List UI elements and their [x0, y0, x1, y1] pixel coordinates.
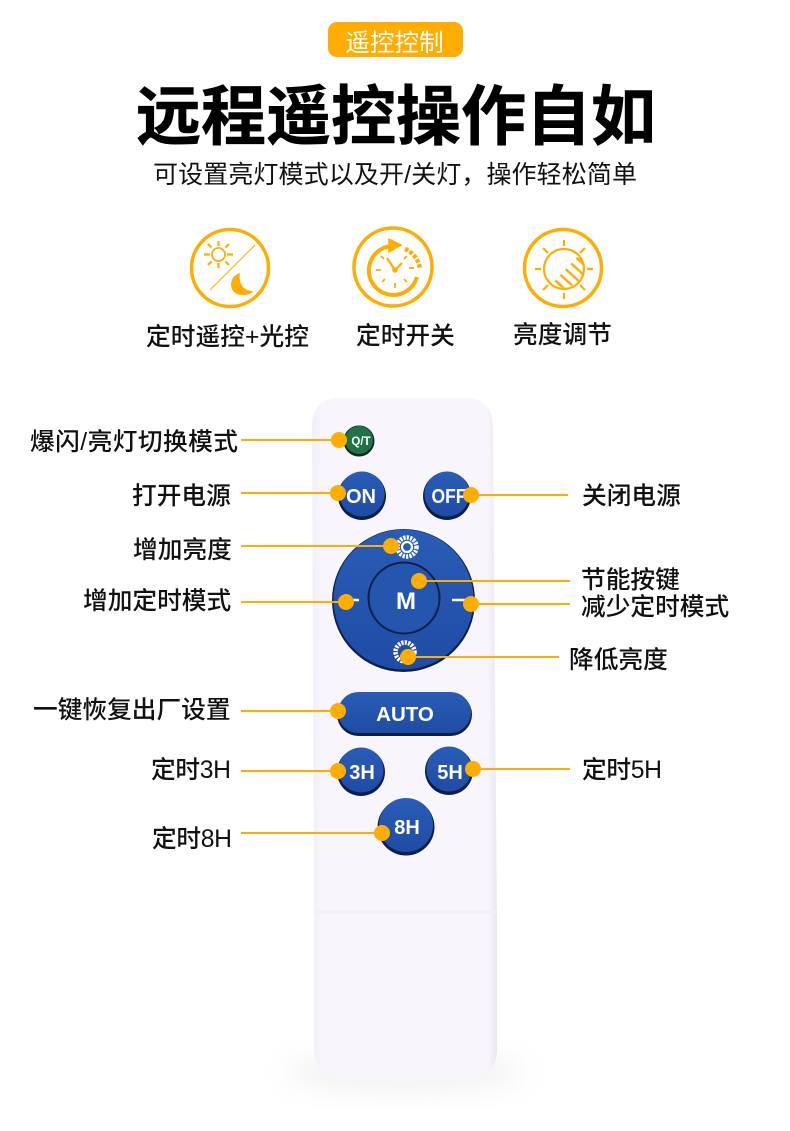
icon: brightness up	[398, 538, 416, 556]
callout: 定时3H: 定时3H	[151, 756, 231, 784]
callout: 定时3H	[151, 756, 346, 784]
icon label: 亮度调节: 亮度调节	[513, 321, 612, 349]
button: OFF	[423, 472, 471, 520]
icon: brightness	[524, 230, 602, 306]
callout: 爆闪/亮灯切换模式	[30, 428, 347, 456]
callout: 节能按键	[411, 566, 680, 594]
callout: 增加亮度: 增加亮度	[133, 536, 232, 564]
callout: 定时5H: 定时5H	[582, 756, 662, 784]
icon label: 定时开关: 定时开关	[356, 322, 455, 350]
callout: 减少定时模式	[463, 593, 729, 621]
button: AUTO: AUTO	[376, 703, 434, 726]
control wheel: M	[396, 588, 416, 615]
button: Q/T: Q/T	[351, 436, 371, 448]
callout: 一键恢复出厂设置	[33, 696, 346, 724]
button: AUTO	[337, 692, 472, 736]
callout: 爆闪/亮灯切换模式: 爆闪/亮灯切换模式	[30, 428, 238, 456]
icon: day and night	[192, 230, 268, 306]
control wheel	[332, 529, 475, 672]
callout: 关闭电源: 关闭电源	[582, 482, 681, 510]
callout: 定时5H	[465, 756, 662, 784]
callout: 打开电源	[132, 482, 346, 510]
icon: timer clock	[354, 228, 432, 306]
remote shadow	[285, 1050, 525, 1094]
callout: 增加亮度	[133, 536, 399, 564]
callout: 降低亮度: 降低亮度	[569, 646, 668, 674]
button: ON: ON	[346, 486, 376, 508]
tag: 遥控控制	[328, 22, 463, 57]
callout: 降低亮度	[400, 646, 668, 674]
button: OFF: OFF	[432, 486, 466, 508]
subtitle: 可设置亮灯模式以及开/关灯，操作轻松简单	[153, 161, 637, 189]
callout: 关闭电源	[463, 482, 681, 510]
callout: 增加定时模式: 增加定时模式	[83, 587, 231, 615]
title: 远程遥控操作自如	[136, 80, 656, 153]
button: 3H	[337, 748, 385, 796]
callout: 节能按键: 节能按键	[581, 566, 680, 594]
callout: 减少定时模式: 减少定时模式	[581, 593, 729, 621]
button: 8H	[378, 798, 434, 856]
tag: 遥控控制: 遥控控制	[345, 29, 444, 57]
button: Q/T	[344, 426, 374, 456]
callout: 一键恢复出厂设置: 一键恢复出厂设置	[33, 696, 231, 724]
button: 8H: 8H	[394, 817, 420, 839]
minus and plus marks	[352, 599, 470, 601]
icon label: 定时遥控+光控: 定时遥控+光控	[146, 323, 309, 351]
button: 5H: 5H	[437, 762, 463, 784]
remote control	[312, 398, 497, 1079]
icon: brightness down	[396, 642, 414, 662]
callout: 定时8H	[152, 825, 390, 853]
button: 3H: 3H	[349, 762, 375, 784]
button: ON	[338, 472, 386, 520]
callout: 定时8H: 定时8H	[152, 825, 232, 853]
callout: 打开电源: 打开电源	[132, 482, 231, 510]
button: 5H	[425, 746, 473, 795]
callout: 增加定时模式	[83, 587, 354, 615]
